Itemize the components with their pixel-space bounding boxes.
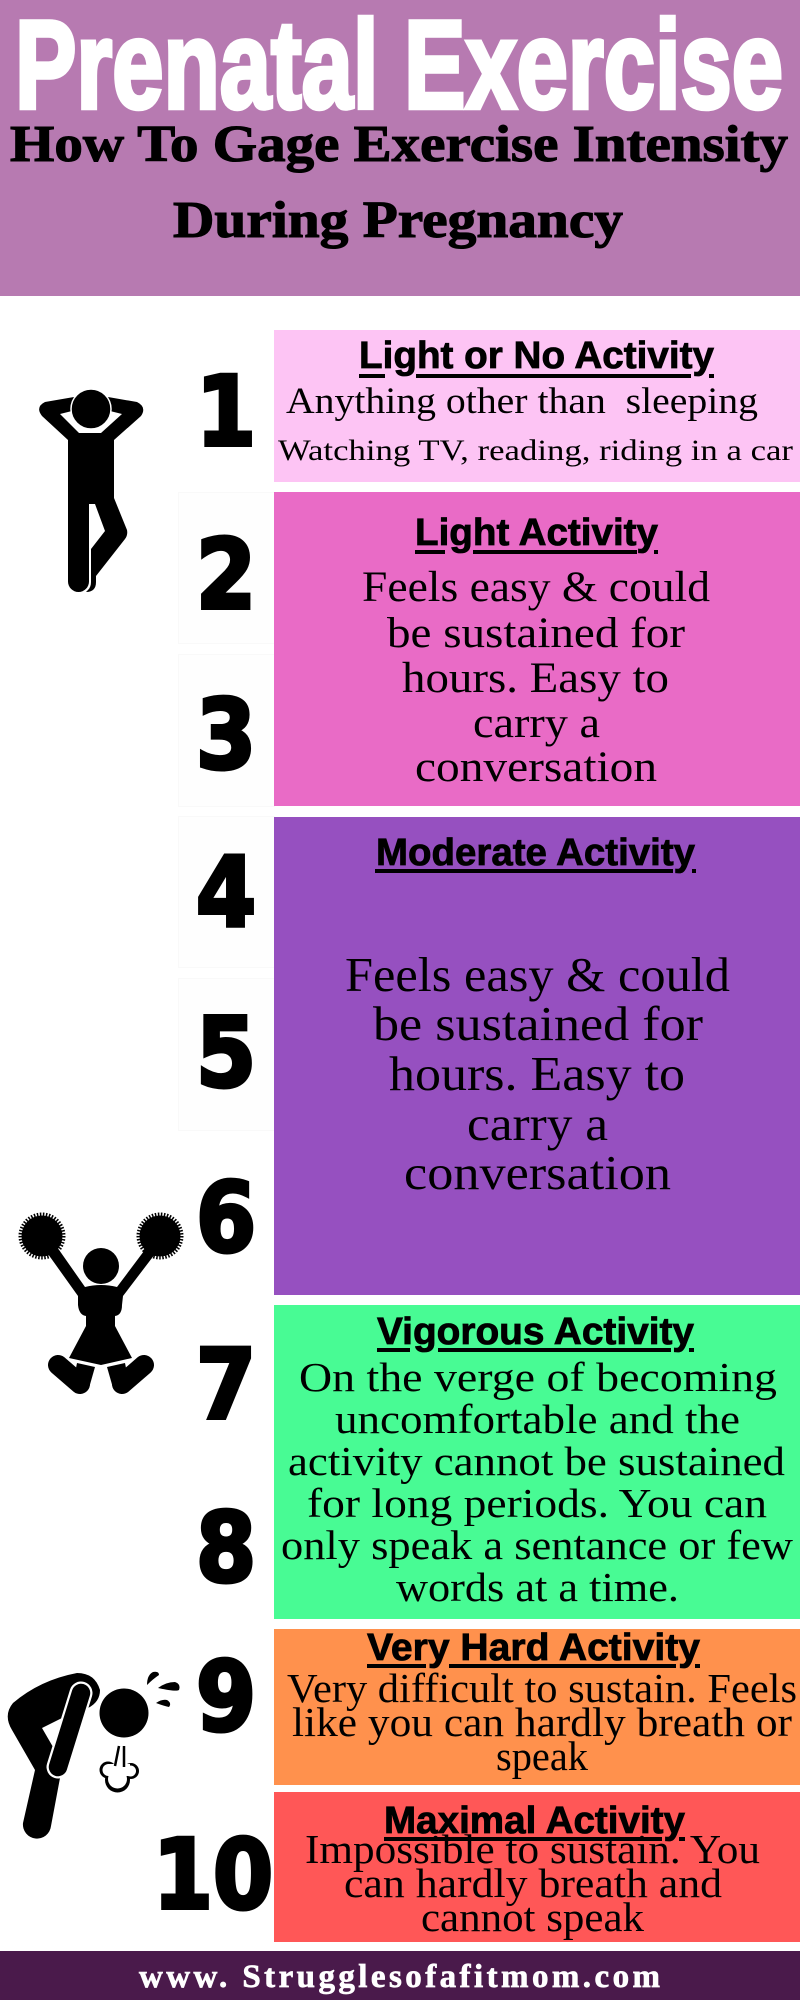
text: description xyxy=(345,947,730,1200)
text: description: On the verge of becoming xyxy=(299,1354,777,1400)
text: description: for long periods. You can xyxy=(307,1480,767,1526)
heading: Very Hard Activity: Very Hard Activity xyxy=(367,1627,700,1669)
panel: level 9 very hard activity xyxy=(274,1627,800,1785)
panel: level 10 maximal activity xyxy=(274,1792,800,1942)
icon: cheerleader with pom-poms xyxy=(20,1214,182,1392)
icon: relaxed person with hands behind head xyxy=(39,389,143,592)
number scale 1 to 10: 7 xyxy=(196,1329,256,1441)
panel: levels 7-8 vigorous activity xyxy=(274,1305,800,1619)
text: description xyxy=(278,381,793,467)
heading: Vigorous Activity: Vigorous Activity xyxy=(377,1311,694,1353)
text: description xyxy=(362,564,710,791)
heading: Light Activity: Light Activity xyxy=(415,512,658,554)
panel: levels 4-6 moderate activity xyxy=(274,817,800,1295)
text: description xyxy=(305,1826,760,1940)
number scale 1 to 10: 2 xyxy=(196,519,256,631)
text: description: speak xyxy=(496,1733,588,1779)
number scale 1 to 10: 9 xyxy=(196,1641,256,1753)
text: description: hours. Easy to xyxy=(389,1046,685,1101)
text: description xyxy=(281,1354,793,1610)
number scale 1 to 10 xyxy=(153,356,273,1931)
text: description: be sustained for xyxy=(373,996,703,1051)
text: description: words at a time. xyxy=(396,1564,679,1610)
text: description: like you can hardly breath or xyxy=(292,1699,792,1745)
text: description: cannot speak xyxy=(421,1894,645,1940)
footer website text: www. Strugglesofafitmom.com xyxy=(139,1959,660,1995)
text: description: Very difficult to sustain. Feels xyxy=(287,1665,797,1711)
text: description: carry a xyxy=(473,700,600,747)
text: description: conversation xyxy=(404,1145,671,1200)
subtitle: How To Gage Exercise Intensity xyxy=(10,116,788,173)
text: description: Feels easy & could xyxy=(345,947,730,1002)
panel: levels 2-3 light activity xyxy=(274,492,800,806)
panel: header xyxy=(0,0,800,296)
number scale 1 to 10: 6 xyxy=(196,1162,256,1274)
number scale 1 to 10: 8 xyxy=(196,1492,256,1604)
text: description: carry a xyxy=(467,1096,608,1151)
number scale 1 to 10: 4 xyxy=(196,837,256,949)
heading: Light or No Activity: Light or No Activity xyxy=(359,335,714,377)
text: description: be sustained for xyxy=(387,610,685,657)
text: description xyxy=(287,1665,797,1779)
text: description: conversation xyxy=(415,744,657,791)
text: description: can hardly breath and xyxy=(344,1860,722,1906)
text: description: Watching TV, reading, riding in a car xyxy=(278,434,793,467)
text: description: Feels easy & could xyxy=(362,564,710,611)
text: description: uncomfortable and the xyxy=(335,1396,740,1442)
text: description: Anything other than sleeping xyxy=(286,381,758,422)
text: description: activity cannot be sustained xyxy=(288,1438,785,1484)
icon: out of breath person bent over xyxy=(8,1672,179,1839)
heading: Maximal Activity: Maximal Activity xyxy=(384,1800,685,1842)
heading: Moderate Activity: Moderate Activity xyxy=(376,832,695,874)
text: description: Impossible to sustain. You xyxy=(305,1826,760,1872)
panel: footer xyxy=(0,1951,800,2000)
subtitle xyxy=(10,116,788,249)
number scale 1 to 10: 5 xyxy=(196,997,256,1109)
text: description: only speak a sentance or few xyxy=(281,1522,793,1568)
panel: level 1 light or no activity xyxy=(274,330,800,482)
number scale 1 to 10: 10 xyxy=(153,1819,273,1931)
subtitle: During Pregnancy xyxy=(173,192,623,249)
number scale 1 to 10: 3 xyxy=(196,679,256,791)
text: description: hours. Easy to xyxy=(402,655,669,702)
number scale 1 to 10: 1 xyxy=(196,356,256,468)
